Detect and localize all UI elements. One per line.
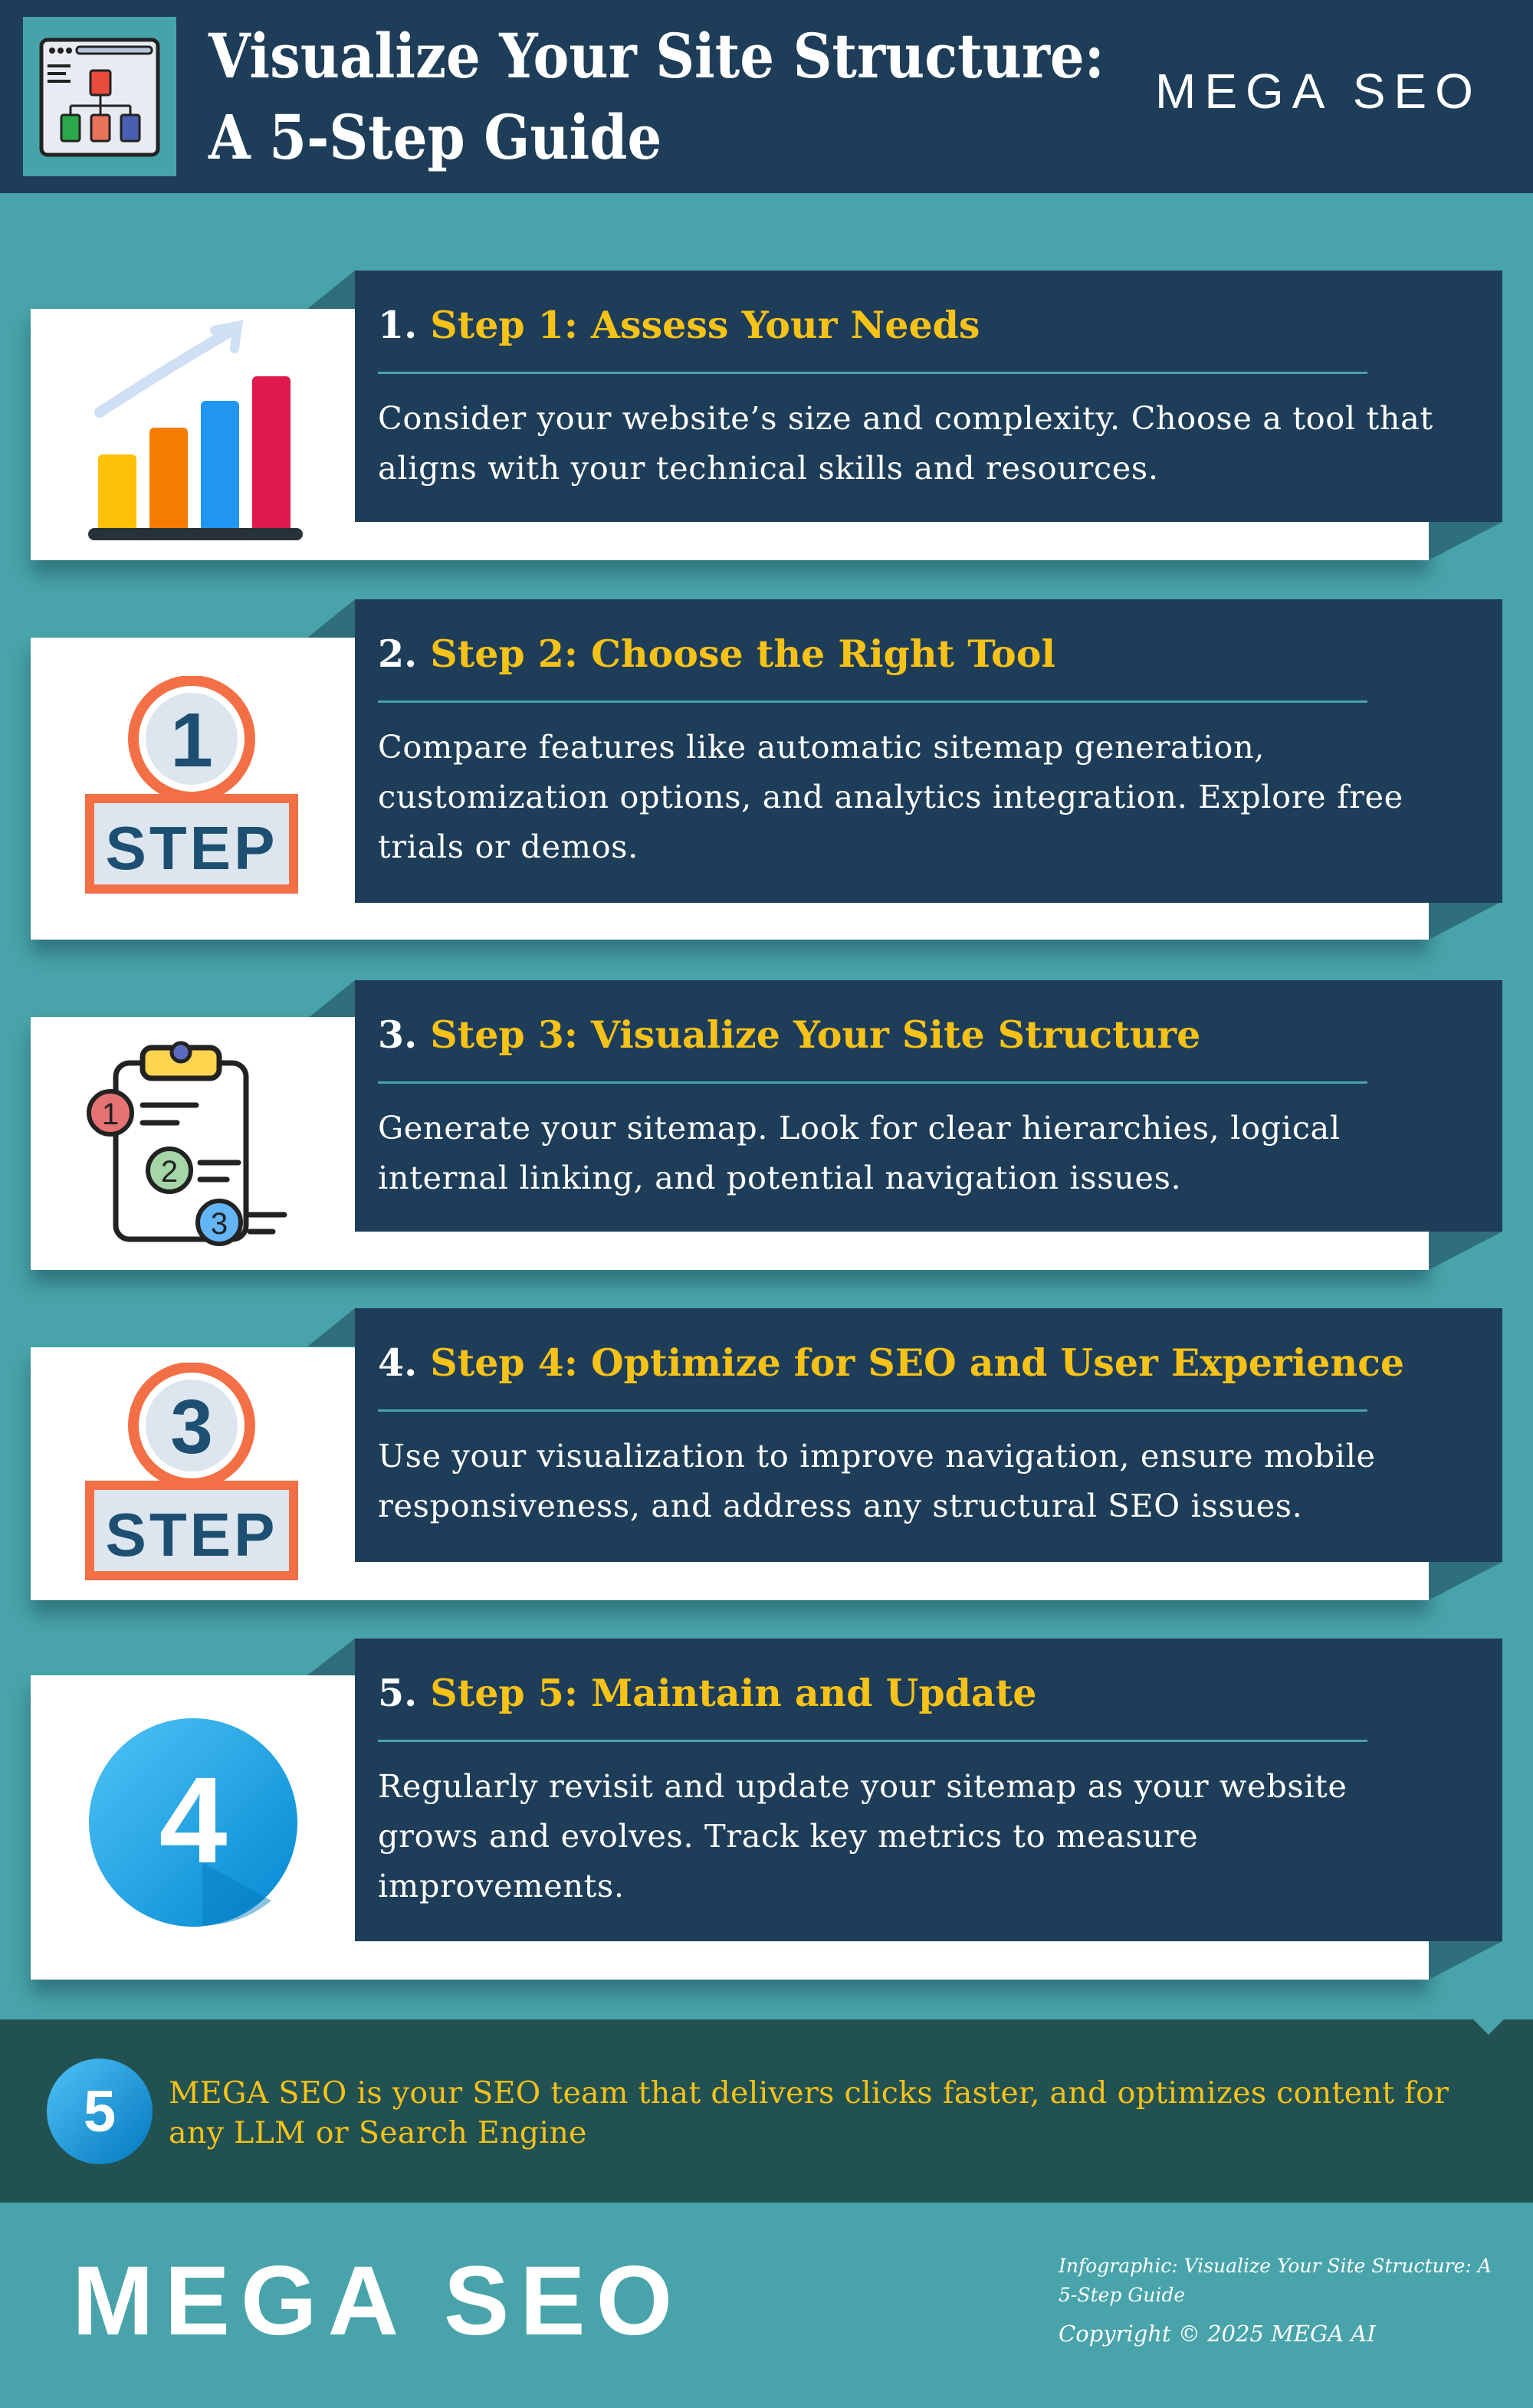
footer credits: [1058, 2255, 1492, 2347]
text: step 4: [378, 1437, 1376, 1524]
icon: sitemap window: [23, 17, 176, 176]
card 2: [21, 599, 1502, 963]
text: step 1: Consider your website’s size and complexity. Choose a tool that: [378, 399, 1433, 437]
text: step 5: improvements.: [378, 1867, 625, 1904]
footer credits: Copyright © 2025 MEGA AI: [1059, 2321, 1376, 2347]
heading: step 3: 3. Step 3: Visualize Your Site Structure: [378, 1012, 1200, 1057]
text: step 4: Use your visualization to improve navigation, ensure mobile: [378, 1437, 1376, 1475]
icon: number 5 circle: 5: [84, 2079, 116, 2144]
footer credits: Infographic: Visualize Your Site Structure: A: [1059, 2255, 1492, 2277]
text: step 4: responsiveness, and address any structural SEO issues.: [378, 1487, 1302, 1524]
text: step 1: aligns with your technical skills and resources.: [378, 449, 1159, 487]
heading: step 2: 2. Step 2: Choose the Right Tool: [378, 632, 1055, 676]
icon: 3 step badge: STEP: [106, 1501, 277, 1569]
title: A 5-Step Guide: [208, 101, 661, 173]
text: step 5: [378, 1767, 1348, 1904]
icon: 1 step badge: 1: [170, 697, 213, 783]
card 5: [21, 1639, 1502, 2002]
header bar: [0, 0, 1533, 193]
text: step 2: [378, 728, 1403, 865]
icon: number 5 circle: [47, 2059, 153, 2164]
text: callout: MEGA SEO is your SEO team that delivers clicks faster, and optimizes content for: [169, 2075, 1449, 2111]
text: step 3: Generate your sitemap. Look for clear hierarchies, logical: [378, 1109, 1341, 1147]
icon: bar chart: [88, 320, 303, 540]
footer credits: 5-Step Guide: [1059, 2284, 1185, 2306]
icon: 1 step badge: [85, 676, 298, 894]
icon: clipboard list: 1: [102, 1097, 119, 1131]
card 1: [21, 271, 1502, 582]
text: callout: any LLM or Search Engine: [169, 2115, 587, 2150]
icon: 3 step badge: [85, 1363, 298, 1580]
icon: clipboard list: 3: [211, 1207, 228, 1241]
icon: clipboard list: [87, 1041, 287, 1246]
heading: step 1: 1. Step 1: Assess Your Needs: [378, 303, 980, 347]
callout band: [0, 2019, 1533, 2203]
title: [208, 20, 1105, 173]
text: step 5: Regularly revisit and update your sitemap as your website: [378, 1767, 1348, 1805]
text: step 3: [378, 1109, 1341, 1196]
icon: number 4 circle: 4: [159, 1751, 228, 1888]
text: step 2: trials or demos.: [378, 828, 638, 865]
card 4: [21, 1308, 1502, 1623]
heading: step 4: 4. Step 4: Optimize for SEO and User Experience: [378, 1340, 1404, 1385]
text: step 5: grows and evolves. Track key metrics to measure: [378, 1817, 1198, 1855]
icon: number 4 circle: [89, 1718, 297, 1927]
logo: MEGA SEO header: MEGA SEO: [1155, 64, 1482, 119]
text: callout: [169, 2075, 1449, 2150]
text: step 2: Compare features like automatic sitemap generation,: [378, 728, 1265, 766]
icon: 1 step badge: STEP: [106, 814, 277, 882]
icon: clipboard list: 2: [161, 1155, 178, 1189]
footer logo: MEGA SEO: MEGA SEO: [72, 2246, 683, 2356]
icon: 3 step badge: 3: [170, 1384, 213, 1470]
card 3: [21, 980, 1502, 1292]
title: Visualize Your Site Structure:: [208, 20, 1105, 92]
text: step 2: customization options, and analytics integration. Explore free: [378, 778, 1403, 815]
text: step 1: [378, 399, 1433, 487]
heading: step 5: 5. Step 5: Maintain and Update: [378, 1671, 1036, 1715]
text: step 3: internal linking, and potential navigation issues.: [378, 1159, 1181, 1196]
